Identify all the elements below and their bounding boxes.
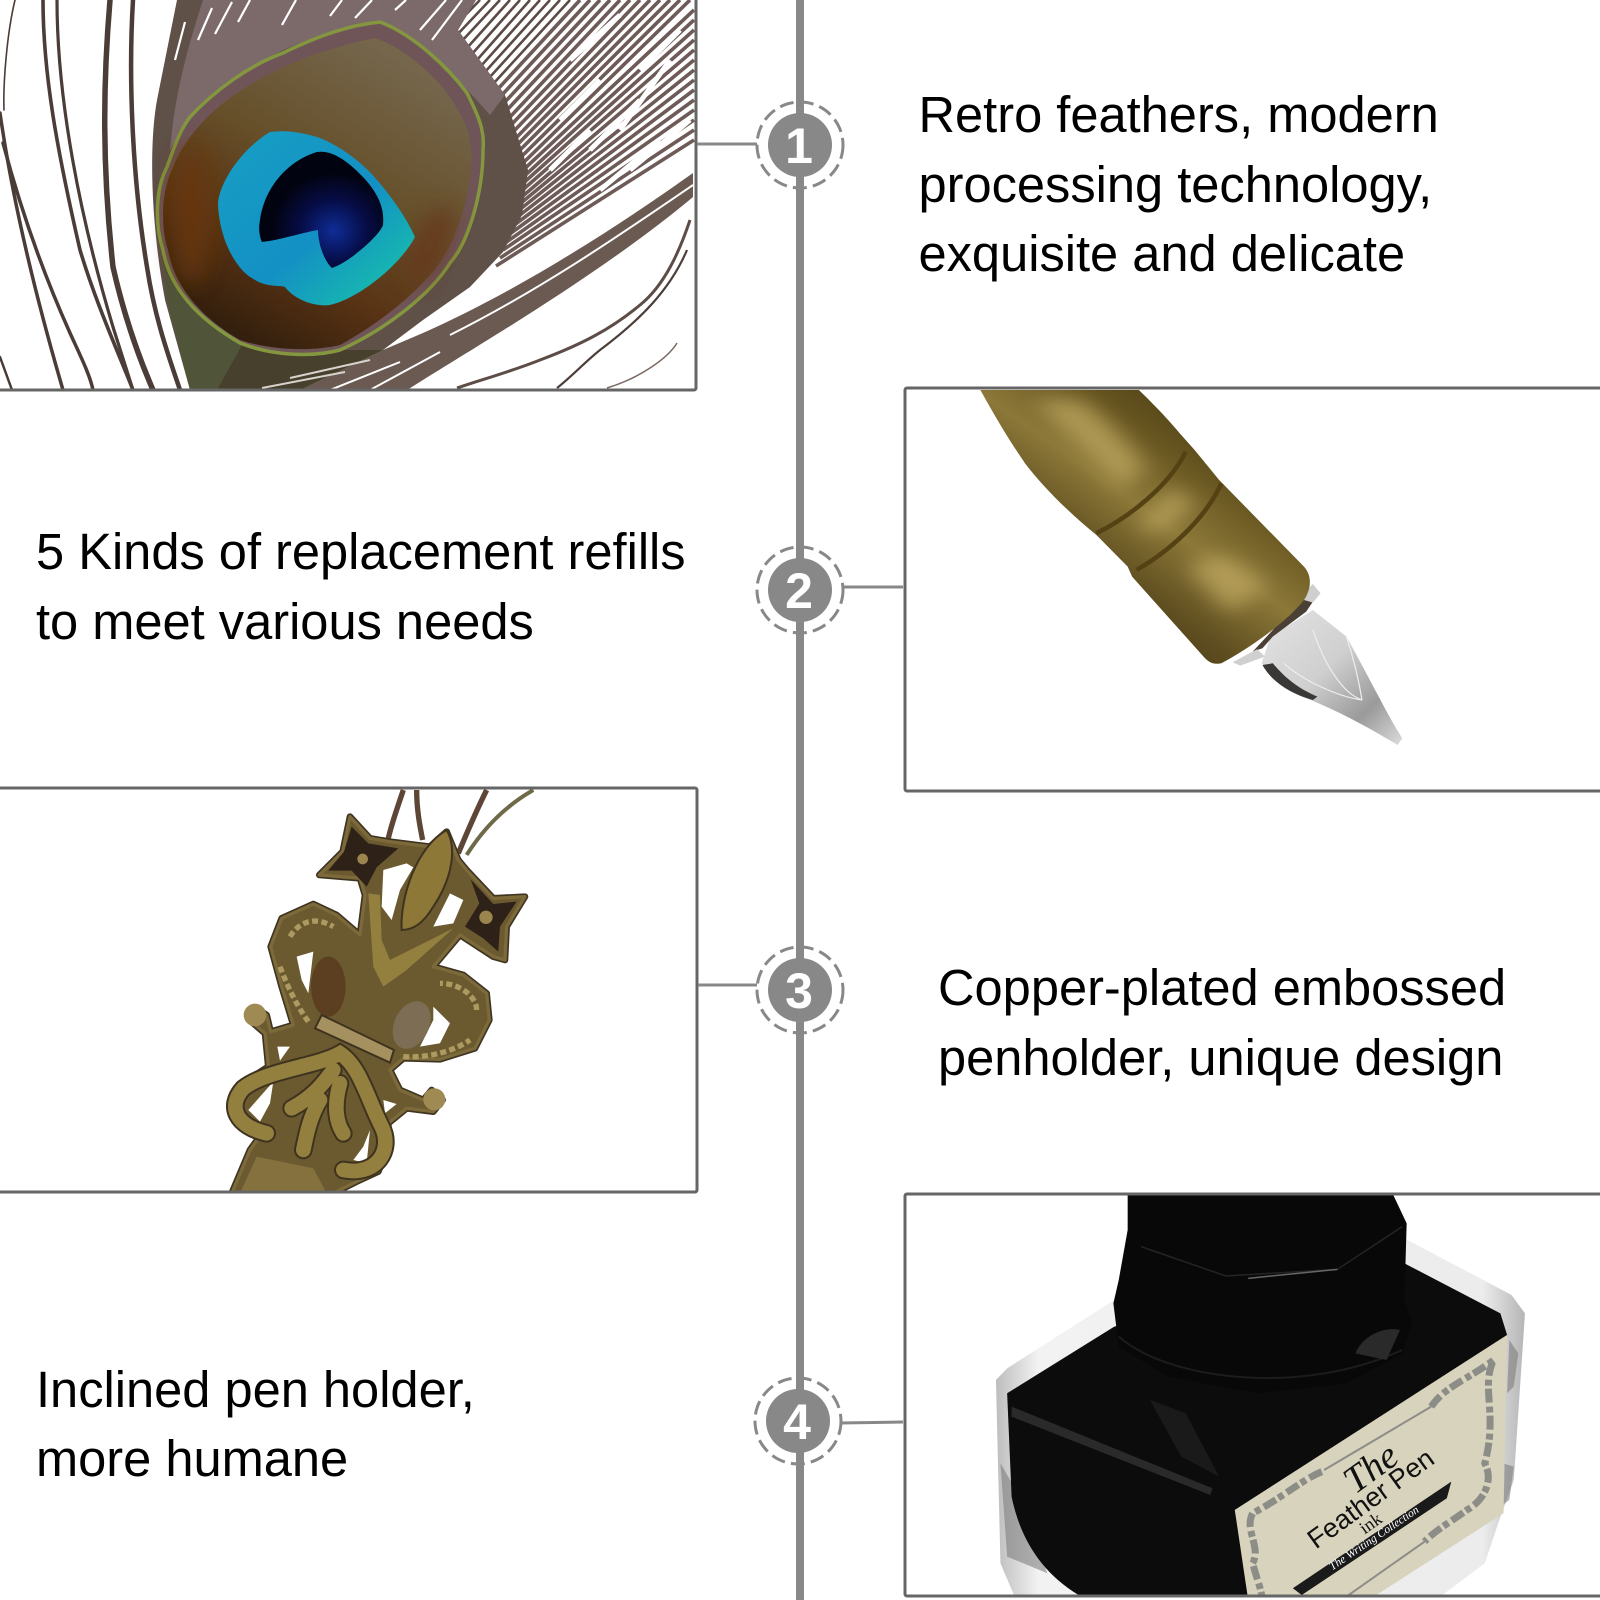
black ink body — [1007, 1263, 1507, 1600]
text: feature 1: Retro feathers, modern — [918, 86, 1439, 143]
panel: pen nib photo — [980, 390, 1402, 745]
text: feature 4: more humane — [36, 1430, 348, 1487]
illustration: ornate copper penholder — [231, 790, 533, 1193]
dark barbs left of the rachis — [162, 258, 242, 388]
connector 1 — [697, 142, 757, 146]
barbs on the upper right fan — [448, 0, 570, 84]
text: feature 3: Copper-plated embossed — [938, 959, 1506, 1016]
barbs on the left — [0, 0, 180, 390]
central leaf — [402, 830, 452, 930]
feather strands — [388, 790, 533, 855]
text: feature 2: 5 Kinds of replacement refills — [36, 523, 686, 580]
badge 1 — [757, 102, 843, 188]
glass bottle — [996, 1238, 1525, 1600]
metal ring, lower end — [1233, 649, 1265, 666]
ink shoulder facet — [1150, 1400, 1219, 1477]
dark star left — [328, 827, 398, 887]
label text: Feather Pen: Feather Pen — [1302, 1443, 1440, 1555]
navy pupil — [259, 152, 383, 268]
gap between grip and nib — [1253, 597, 1313, 652]
thin lower barbs — [457, 220, 690, 388]
side balls — [244, 1004, 266, 1026]
text: feature 1: exquisite and delicate — [918, 225, 1405, 282]
pen grip — [980, 390, 1310, 664]
purple rim band with green edge — [157, 22, 483, 354]
dense aura behind the eye — [152, 0, 528, 390]
badge 3 — [757, 947, 843, 1033]
ink shoulder sheen — [1012, 1407, 1212, 1495]
badge 2 — [757, 547, 843, 633]
bronze body of the eye — [163, 38, 472, 349]
panel: ink bottle photo — [996, 1195, 1525, 1600]
illustration: black ink bottle — [996, 1195, 1525, 1600]
badge 3: 3 — [785, 963, 813, 1019]
badge 1: 1 — [785, 118, 813, 174]
scroll highlights — [280, 921, 477, 1057]
shaft highlight — [240, 1157, 327, 1193]
label — [1235, 1335, 1507, 1600]
steel nib — [1262, 610, 1402, 745]
penholder silhouette — [231, 817, 525, 1193]
text: feature 2: to meet various needs — [36, 593, 534, 650]
turquoise iris — [218, 131, 415, 305]
label text: ink: ink — [1355, 1508, 1386, 1538]
metal ring, upper end — [1304, 584, 1321, 603]
label ornaments — [1250, 1360, 1494, 1597]
panel frame: penholder — [0, 788, 697, 1192]
top mottled band — [170, 0, 505, 150]
label text: The: The — [1336, 1434, 1406, 1502]
illustration: gold pen grip and nib — [980, 390, 1402, 745]
barbs on the right fan — [496, 0, 694, 266]
nib engraving — [1284, 630, 1362, 700]
label text: The Writing Collection: The Writing Collection — [1327, 1504, 1422, 1573]
text: feature 1: processing technology, — [918, 156, 1432, 213]
text: feature 3: penholder, unique design — [938, 1029, 1503, 1086]
central stem highlight — [368, 893, 453, 987]
connector 2 — [843, 586, 903, 588]
badge 4 — [755, 1378, 841, 1464]
panel: copper penholder photo — [231, 790, 533, 1193]
nib underside shadow — [1262, 663, 1317, 700]
brown cabochons — [311, 957, 346, 1017]
panel frame: ink bottle — [905, 1194, 1600, 1596]
grip grooves — [1096, 452, 1186, 533]
panel frame: feather — [0, 0, 696, 390]
warm glow on the lower right — [411, 207, 464, 292]
grip highlights — [1034, 400, 1266, 613]
bottle cap with flange — [1113, 1195, 1412, 1393]
black banner on label — [1293, 1482, 1451, 1595]
connector 4 — [840, 1422, 903, 1423]
dark barbs right of the rachis — [217, 343, 383, 390]
connector 3 — [698, 984, 757, 986]
glass reflections — [1000, 1340, 1518, 1573]
badge 2: 2 — [785, 563, 813, 619]
cross bar — [315, 1015, 394, 1063]
dark recess of the lower scroll — [235, 1053, 385, 1171]
white streaks in the top band — [175, 0, 462, 60]
panel: peacock feather photo — [0, 0, 694, 390]
white cutouts — [248, 863, 463, 1163]
lower right strand band — [300, 173, 693, 390]
lower scroll and finger relief — [235, 1053, 385, 1171]
cap ridge glint — [1248, 1269, 1337, 1278]
dark star right — [465, 879, 517, 952]
white streaks at the base — [262, 360, 370, 388]
cap facet lines — [1141, 1227, 1402, 1276]
warm glow on the left bronze — [172, 145, 212, 285]
central timeline — [796, 0, 804, 1600]
silhouette inner stroke rounding the corners — [231, 817, 525, 1193]
panel frame: pen nib — [905, 388, 1600, 791]
flange notch — [1355, 1329, 1400, 1360]
flange line — [1119, 1337, 1402, 1378]
badge 4: 4 — [783, 1394, 811, 1450]
text: feature 4: Inclined pen holder, — [36, 1361, 475, 1418]
white slits in the strand band — [330, 185, 693, 390]
white flecks across the fan — [550, 15, 690, 190]
